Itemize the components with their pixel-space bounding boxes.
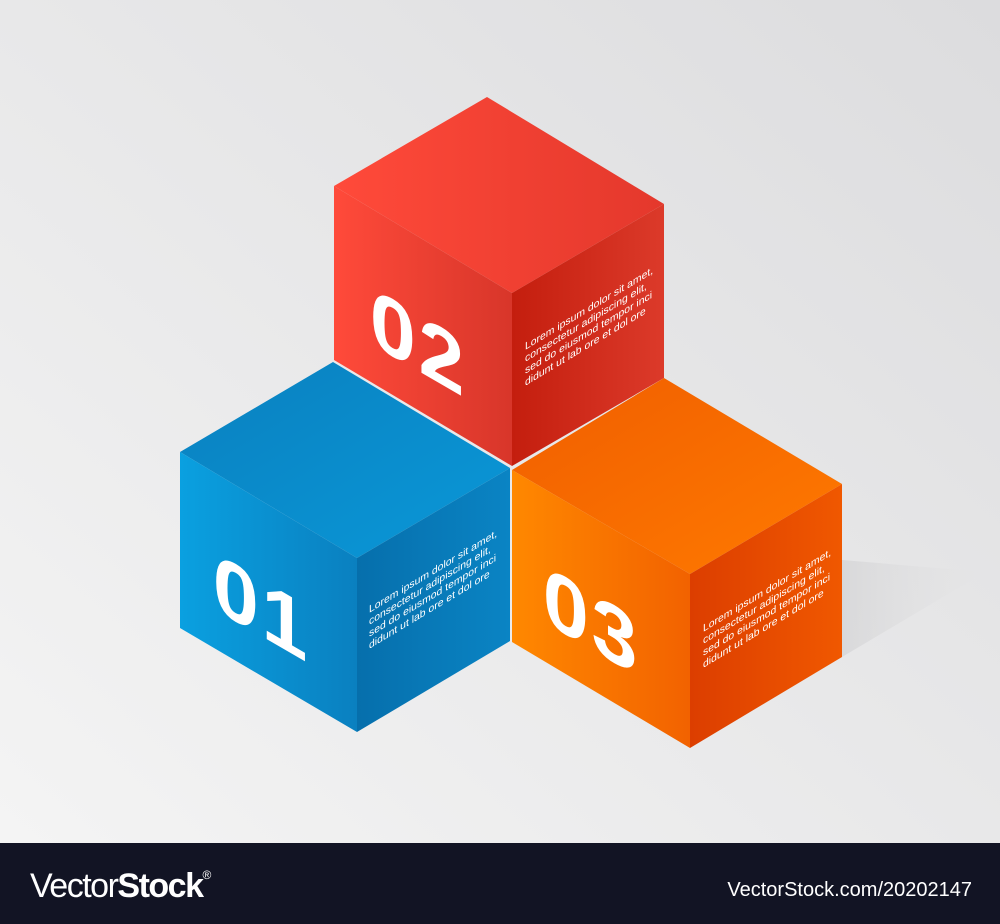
text block 03: Lorem ipsum dolor sit amet, xyxy=(703,547,831,635)
shadow xyxy=(842,560,985,657)
url: VectorStock.com/20202147 xyxy=(727,879,972,901)
text block 03: sed do eiusmod tempor inci xyxy=(703,572,830,659)
text block 01: sed do eiusmod tempor inci xyxy=(369,553,496,640)
number 02: 02 xyxy=(370,269,467,417)
text block 01: consectetur adipiscing elit, xyxy=(369,544,491,628)
cube 02 red xyxy=(334,97,664,466)
text block 02: didunt ut lab ore et dol ore xyxy=(525,305,646,389)
number 01: 01 xyxy=(213,534,310,682)
footer xyxy=(0,843,1000,924)
text block 02: sed do eiusmod tempor inci xyxy=(525,290,652,377)
number 03: 03 xyxy=(543,547,640,695)
text block 01: Lorem ipsum dolor sit amet, xyxy=(369,528,497,616)
logo: VectorStock xyxy=(30,867,202,905)
cube 03 orange xyxy=(512,378,842,748)
text block 02: Lorem ipsum dolor sit amet, xyxy=(525,265,653,353)
cube 01 blue xyxy=(180,362,510,732)
text block 03: didunt ut lab ore et dol ore xyxy=(703,587,824,671)
text block 01: didunt ut lab ore et dol ore xyxy=(369,568,490,652)
text block 03: consectetur adipiscing elit, xyxy=(703,563,825,647)
text block 02: consectetur adipiscing elit, xyxy=(525,281,647,365)
logo: ® xyxy=(202,868,211,882)
